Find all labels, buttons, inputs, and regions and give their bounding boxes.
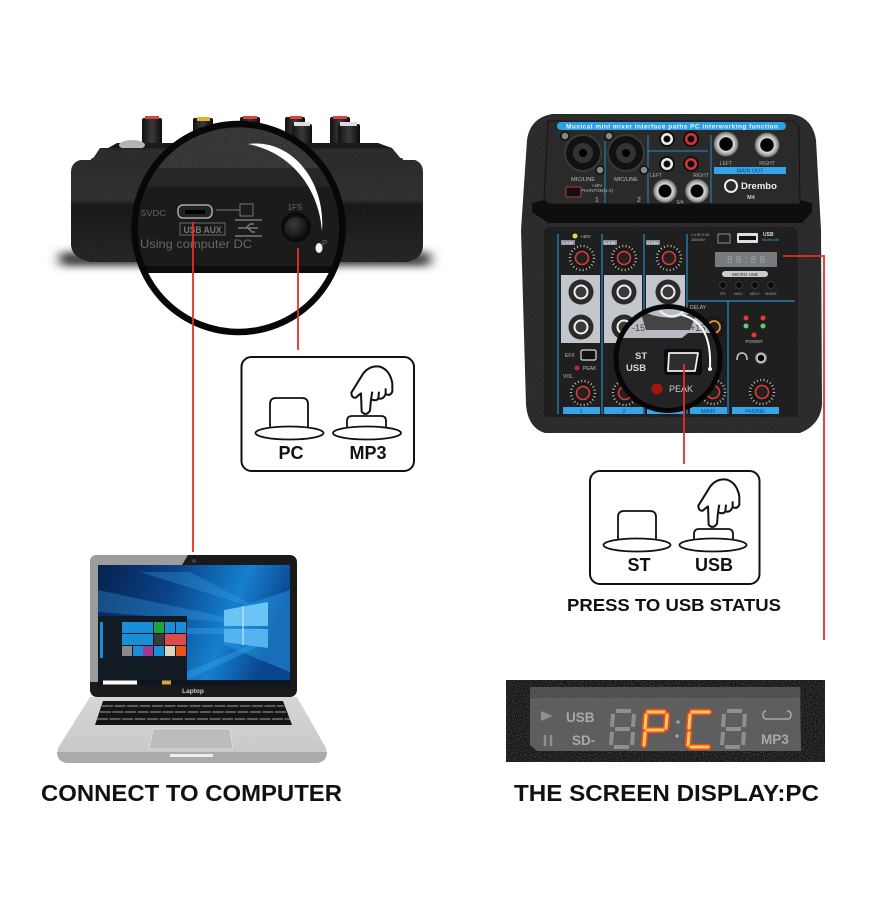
mode badge and transport buttons: PC [720,292,726,296]
connector: button to PC/MP3 box [297,248,299,350]
mode badge and transport buttons [720,271,777,296]
EQ knobs [568,280,680,340]
EFX switch and peak: VOL [563,374,573,380]
XLR input 1 [561,132,604,174]
channel strips: 1 [579,409,583,415]
label: PC: PC [278,443,304,463]
brand logo [725,180,777,201]
phantom switch [566,187,581,197]
icon: raised ST button [604,511,670,552]
mode badge and transport buttons: MIC/- [734,292,744,296]
mode badge and transport buttons: MODE [765,292,777,296]
caption: press to USB status: PRESS TO USB STATUS [567,595,781,615]
RCA jacks [660,132,698,171]
EFX switch and peak: EFX [565,353,575,359]
mixer body [521,114,822,433]
status LEDs: POWER [745,339,763,344]
icon: raised PC button [256,398,324,440]
status LED [316,239,327,253]
laptop brand: Laptop [182,688,204,695]
USB label: USB [626,363,646,374]
main out strip: MAIN OUT [737,168,764,174]
gain labels [561,240,660,246]
top panel dividers [605,135,711,203]
upper panel [544,121,800,204]
magnifier: USB switch [614,304,722,414]
lower panel [544,227,798,417]
dim digit 1 [611,711,634,747]
peak label: PEAK [669,384,693,394]
phantom LED [572,234,591,239]
dim digit 4 [722,711,745,747]
lens ring [616,306,720,410]
EQ panels [561,275,685,343]
pause icon [545,735,551,746]
panel: rear view of mixer [60,116,430,266]
screen [98,565,290,685]
label: MP3: MP3 [349,443,387,463]
label: SD: SD- [572,733,595,748]
white highlight arc [248,143,322,231]
taskbar [98,680,290,685]
input labels: MIC/LINE [571,177,595,183]
headphone jack [737,352,767,364]
upper bezel [532,200,812,223]
jack labels: RIGHT [693,173,709,179]
laptop lid [90,555,297,697]
volume knobs [570,379,775,406]
quarter-inch jacks [653,132,780,203]
gain labels: GAIN [647,240,658,246]
brand logo: M4 [747,195,756,201]
caption: screen display: THE SCREEN DISPLAY:PC [514,780,819,806]
panel: screen display photo [506,680,825,762]
laptop [57,555,327,763]
usage text: Using computer DC [140,237,252,251]
push button [281,212,311,242]
input labels: 2 [637,197,641,204]
callout: PC / MP3 switch [242,357,414,471]
icon: pressed USB button with hand [680,479,746,552]
play icon [541,711,553,721]
connector: USB port to laptop [192,222,194,552]
toggle switch [664,349,702,375]
channel strips: 2 [622,409,626,415]
jack labels: LEFT [720,161,732,167]
USB port: Bluetooth [762,237,779,242]
gain knobs [569,245,682,271]
display glass [530,687,801,751]
icon: repeat [763,711,791,719]
touchpad [149,729,233,749]
magnifier: USB switch: +15 [690,323,705,333]
input labels: 1 [595,197,599,204]
floor shadow [60,252,430,266]
panel: mixer front view [521,114,822,433]
input labels: MIC/LINE [614,177,638,183]
mode badge and transport buttons: MIC/+ [750,292,761,296]
channel strips [563,407,779,415]
jack labels: RIGHT [759,161,775,167]
input labels: PHANTOM(1-2) [581,188,613,193]
mixer body [71,148,423,262]
USB port: USB [763,232,774,238]
input labels [571,177,641,204]
main out strip [714,167,786,174]
USB port [691,232,779,243]
channel strips: MAIN [701,409,715,415]
connector: switch to ST/USB box [683,364,685,464]
input labels: +48V [592,183,602,188]
ST label: ST [635,351,647,362]
lit digit C [688,712,709,747]
caption: connect to computer: CONNECT TO COMPUTER [41,780,342,806]
label: USB: USB [566,710,595,725]
colon dots [675,720,680,738]
knobs behind the mixer [142,116,360,152]
lens ring [134,124,342,332]
jack labels: LEFT [650,173,662,179]
delay knob: DELAY [690,305,707,311]
USB label: USB AUX [184,225,222,235]
gain labels: GAIN [562,240,573,246]
banner: Musical mini mixer interface paths PC interworking function [566,124,778,130]
USB port: 48000Hz [691,238,705,242]
status LEDs [744,316,766,344]
channel dividers [558,234,795,414]
EFX switch and peak [563,350,597,380]
windows logo [224,602,268,648]
laptop base [58,697,326,756]
connector: display to screen photo [783,256,824,640]
lit digit P [644,712,667,745]
status LED: P [322,239,327,248]
label: MP3: MP3 [761,732,789,747]
USB/MP3 label: 1FS [288,203,302,212]
mini LED display [715,252,777,267]
gain labels: GAIN [604,240,615,246]
metal screw and top deck [108,143,392,160]
label: ST: ST [627,555,651,575]
keyboard [95,701,292,725]
5VDC label: 5VDC [141,209,166,218]
icon: pressed MP3 button with hand [333,366,401,440]
USB port: 2.4 5V 0.5A [691,233,710,237]
XLR input 2 [605,132,648,174]
channel strips: PHONE [745,409,765,415]
jack labels [650,161,775,206]
mini LED display: 88:88 [727,255,765,266]
label: USB: USB [695,555,733,575]
start menu [98,616,187,680]
magnifier: rear ports [130,120,350,338]
white highlight arc [682,315,710,368]
EFX switch and peak: PEAK [583,366,597,372]
micro USB port [178,204,253,218]
delay knob [690,305,726,339]
magnifier: USB switch: -15 [632,323,645,333]
brand logo: Drembo [741,181,777,192]
jack labels: 3/4 [677,200,684,206]
phantom LED: +48V [580,234,591,239]
callout: ST / USB switch [590,471,760,584]
peak LED [652,384,662,394]
mode badge and transport buttons: MICRO USB [732,272,758,277]
USB symbol [235,220,262,236]
